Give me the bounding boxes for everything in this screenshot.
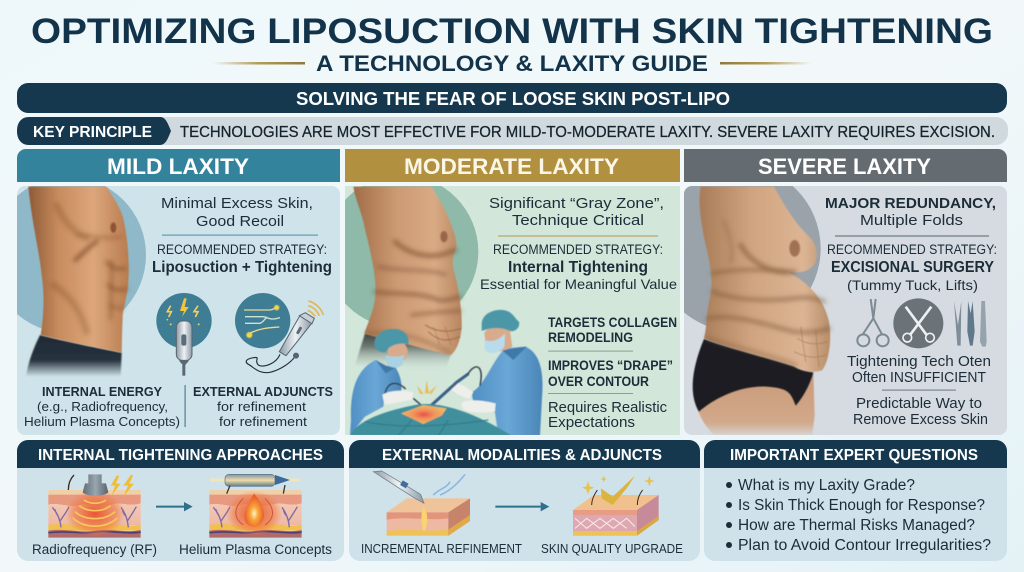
text: severe notes: Often INSUFFICIENT xyxy=(852,370,986,386)
text: mild description: Minimal Excess Skin, xyxy=(161,195,313,212)
text: moderate description: Significant “Gray Zone”, xyxy=(489,195,664,212)
text: moderate benefits xyxy=(548,315,677,431)
panel: internal tightening approaches xyxy=(17,440,344,561)
panel: internal tightening approaches: INTERNAL TIGHTENING APPROACHES xyxy=(38,447,323,464)
text: mild description: Good Recoil xyxy=(196,213,284,230)
arrow: refinement to upgrade xyxy=(495,502,549,511)
text: severe strategy xyxy=(827,242,997,293)
list: expert questions: What is my Laxity Grade? xyxy=(738,477,915,494)
panel: mild laxity xyxy=(0,177,340,435)
title: OPTIMIZING LIPOSUCTION WITH SKIN TIGHTENING xyxy=(31,12,993,51)
text: severe strategy: EXCISIONAL SURGERY xyxy=(831,259,995,276)
text: moderate benefits: OVER CONTOUR xyxy=(548,374,649,389)
text: mild strategy: Liposuction + Tightening xyxy=(152,259,332,276)
text: internal energy xyxy=(24,384,180,429)
header: moderate laxity xyxy=(345,149,680,182)
illustration: skin quality upgrade block xyxy=(573,476,659,536)
list: expert questions: Plan to Avoid Contour Irregularities? xyxy=(738,537,991,554)
list: expert questions: Is Skin Thick Enough for Response? xyxy=(738,497,985,514)
text: internal energy: (e.g., Radiofrequency, xyxy=(37,399,168,414)
text: incremental refinement label: INCREMENTAL REFINEMENT xyxy=(361,542,522,556)
text: moderate benefits: Expectations xyxy=(548,415,635,431)
text: moderate description: Technique Critical xyxy=(512,212,644,229)
panel: important expert questions: IMPORTANT EXPERT QUESTIONS xyxy=(730,447,978,464)
illustration: incremental refinement block xyxy=(373,471,470,536)
text: external adjuncts xyxy=(193,384,333,429)
text: external adjuncts: EXTERNAL ADJUNCTS xyxy=(193,384,333,399)
text: moderate strategy: Internal Tightening xyxy=(508,259,648,276)
panel: moderate laxity xyxy=(325,175,680,436)
text: severe notes xyxy=(847,354,991,428)
illustration: helium plasma skin xyxy=(209,474,302,538)
text: moderate strategy: RECOMMENDED STRATEGY: xyxy=(493,242,663,257)
panel: important expert questions xyxy=(704,440,1007,561)
text: internal energy: INTERNAL ENERGY xyxy=(42,384,162,399)
illustration: radiofrequency skin xyxy=(48,474,141,538)
surgeon: assistant xyxy=(350,329,421,435)
arrow: rf to helium plasma xyxy=(156,502,193,511)
text: radiofrequency label: Radiofrequency (RF) xyxy=(32,542,157,557)
key principle bar xyxy=(17,117,1008,145)
text: skin quality upgrade label: SKIN QUALITY UPGRADE xyxy=(541,542,683,556)
icon: internal energy handpiece xyxy=(156,293,212,376)
header: moderate laxity: MODERATE LAXITY xyxy=(404,154,619,179)
icon: external adjunct wand xyxy=(235,293,323,373)
text: moderate benefits: TARGETS COLLAGEN xyxy=(548,315,677,330)
icon: surgical instruments xyxy=(857,298,987,348)
torso photo: mild xyxy=(17,186,146,376)
surgeon: operator xyxy=(431,310,543,436)
panel: external modalities and adjuncts xyxy=(349,440,700,561)
text: mild strategy: RECOMMENDED STRATEGY: xyxy=(157,242,327,257)
text: moderate benefits: REMODELING xyxy=(548,330,633,345)
text: severe description xyxy=(825,195,996,229)
text: moderate benefits: IMPROVES “DRAPE” xyxy=(548,358,673,373)
text: severe notes: Predictable Way to xyxy=(856,396,982,412)
list: expert questions: How are Thermal Risks Managed? xyxy=(738,517,975,534)
text: severe strategy: RECOMMENDED STRATEGY: xyxy=(827,242,997,257)
text: severe strategy: (Tummy Tuck, Lifts) xyxy=(847,277,978,293)
banner: solving the fear: SOLVING THE FEAR OF LOOSE SKIN POST-LIPO xyxy=(296,89,730,109)
text: moderate description xyxy=(489,195,664,229)
subtitle with gold rules: A TECHNOLOGY & LAXITY GUIDE xyxy=(316,51,708,76)
header: mild laxity xyxy=(17,149,340,182)
text: severe description: MAJOR REDUNDANCY, xyxy=(825,195,996,212)
key principle bar: KEY PRINCIPLE xyxy=(33,124,152,141)
panel: severe laxity xyxy=(684,186,1007,435)
header: mild laxity: MILD LAXITY xyxy=(107,154,249,179)
text: external adjuncts: for refinement xyxy=(217,399,306,414)
text: external adjuncts: for refinement xyxy=(219,414,307,429)
header: severe laxity xyxy=(684,149,1007,182)
banner: solving the fear xyxy=(17,83,1007,113)
text: severe notes: Tightening Tech Oten xyxy=(847,354,991,370)
text: moderate benefits: Requires Realistic xyxy=(548,400,667,416)
torso photo: severe xyxy=(654,165,830,435)
list: expert questions xyxy=(726,477,991,554)
text: severe notes: Remove Excess Skin xyxy=(853,412,988,428)
surgical drape and incision xyxy=(350,380,512,436)
text: mild strategy xyxy=(152,242,332,276)
header: severe laxity: SEVERE LAXITY xyxy=(758,154,931,179)
text: mild description xyxy=(161,195,313,230)
text: helium plasma label: Helium Plasma Concepts xyxy=(179,542,332,557)
text: moderate strategy: Essential for Meaningful Value xyxy=(480,276,677,292)
torso photo: moderate xyxy=(345,186,544,435)
panel: external modalities and adjuncts: EXTERNAL MODALITIES & ADJUNCTS xyxy=(382,447,662,464)
text: severe description: Multiple Folds xyxy=(860,212,963,229)
text: moderate strategy xyxy=(480,242,677,292)
text: internal energy: Helium Plasma Concepts) xyxy=(24,414,180,429)
key principle bar: TECHNOLOGIES ARE MOST EFFECTIVE FOR MILD-TO-MODERATE LAXITY. SEVERE LAXITY REQUIRES EXCISION. xyxy=(180,124,995,141)
